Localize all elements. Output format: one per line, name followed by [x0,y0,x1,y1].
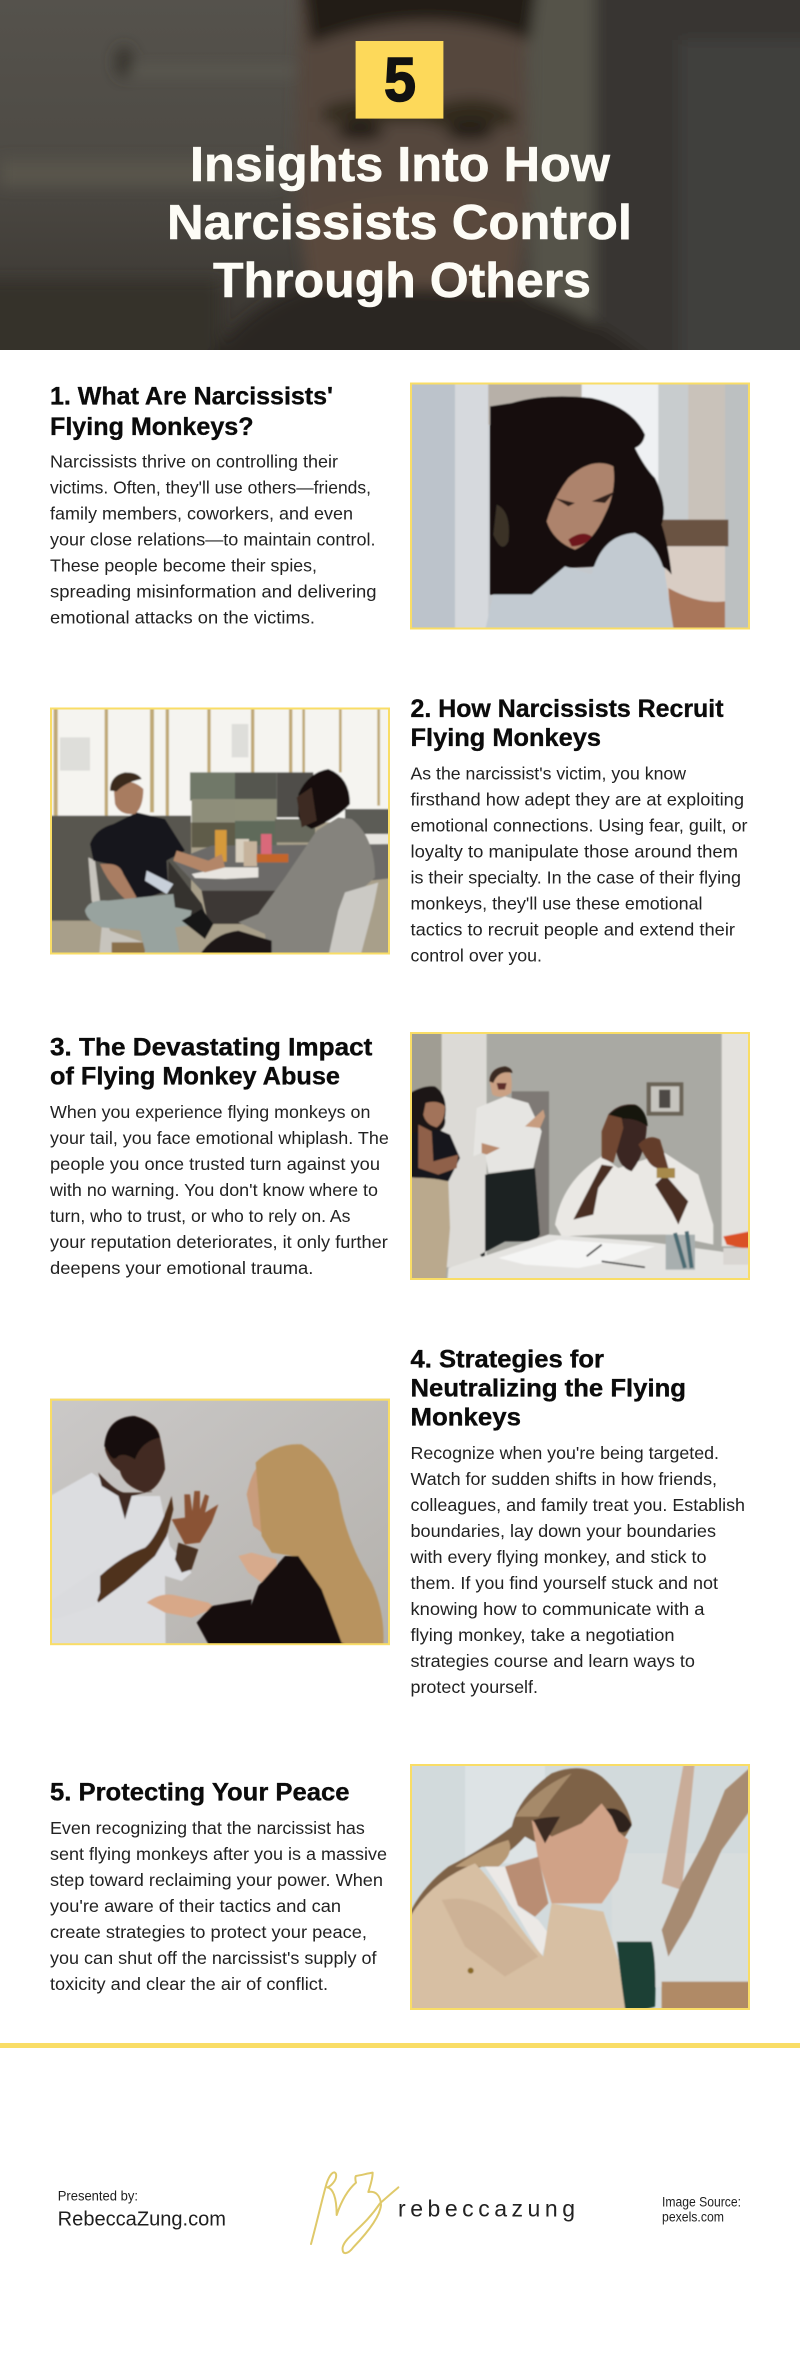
body text: section 2: control over you. [410,946,542,966]
heading: section 4: Monkeys [410,1403,521,1431]
body text: section 4: them. If you find yourself stuck and not [410,1573,718,1593]
body text: section 1: spreading misinformation and delivering [50,582,376,602]
presenter credit [58,2187,226,2231]
body text: section 2: loyalty to manipulate those around them [410,842,738,862]
body text: section 3 [49,1102,389,1278]
panel: section 4 [38,1345,745,1697]
heading: section 5: 5. Protecting Your Peace [50,1778,350,1806]
logo wordmark: rebeccazung [398,2196,575,2222]
photo: angry woman with dark curly hair and beret [410,382,750,630]
body text: section 4: strategies course and learn ways to [410,1651,695,1671]
number badge: 5 [384,46,416,115]
heading: section 3: 3. The Devastating Impact [50,1033,373,1061]
body text: section 3: When you experience flying monkeys on [50,1102,370,1122]
body text: section 2: is their specialty. In the case of their flying [410,868,741,888]
body text: section 3: with no warning. You don't know where to [49,1180,378,1200]
body text: section 2: monkeys, they'll use these emotional [410,894,702,914]
footer [58,2172,741,2253]
header panel [0,0,800,350]
heading: section 3 [50,1033,373,1090]
body text: section 2 [410,764,748,966]
body text: section 4: with every flying monkey, and stick to [409,1547,706,1567]
image source credit: pexels.com [662,2209,724,2224]
photo: man and woman arguing with raised hands [38,1396,395,1656]
number badge [356,41,443,119]
body text: section 5: Even recognizing that the narcissist has [50,1818,365,1838]
body text: section 1 [50,452,376,628]
logo signature mark [311,2172,398,2253]
panel: section 1 [50,371,758,638]
body text: section 4: Recognize when you're being targeted. [410,1443,719,1463]
body text: section 4: flying monkey, take a negotiation [410,1625,674,1645]
body text: section 1: family members, coworkers, and even [50,504,353,524]
heading: section 1: Flying Monkeys? [50,413,254,441]
heading: section 3: of Flying Monkey Abuse [50,1062,340,1090]
header photo: blurred man covering mouth [0,0,800,350]
body text: section 1: These people become their spies, [50,556,317,576]
body text: section 3: deepens your emotional trauma. [50,1258,313,1278]
heading: section 4: Neutralizing the Flying [410,1374,686,1402]
heading: section 1: 1. What Are Narcissists' [50,383,333,411]
panel: section 5 [50,1753,758,2020]
title [167,138,632,308]
logo: rebeccazung signature and wordmark [311,2172,575,2253]
heading: section 2 [410,695,724,752]
heading: section 4: 4. Strategies for [410,1345,604,1373]
body text: section 5: you can shut off the narcissist's supply of [50,1948,377,1968]
body text: section 3: your tail, you face emotional whiplash. The [50,1128,389,1148]
body text: section 5: you're aware of their tactics and can [50,1896,341,1916]
body text: section 1: Narcissists thrive on controlling their [50,452,338,472]
body text: section 3: people you once trusted turn against you [50,1154,380,1174]
photo: man stressed at desk while coworkers laugh [410,1032,750,1280]
body text: section 2: As the narcissist's victim, you know [410,764,686,784]
body text: section 5: toxicity and clear the air of conflict. [50,1974,328,1994]
body text: section 2: firsthand how adept they are at exploiting [410,790,744,810]
body text: section 4: knowing how to communicate with a [410,1599,705,1619]
image source credit: Image Source: [662,2194,741,2209]
body text: section 3: your reputation deteriorates, it only further [50,1232,388,1252]
heading: section 2: Flying Monkeys [410,724,601,752]
photo: two men talking at a table [50,708,390,954]
body text: section 4 [409,1443,745,1697]
photo: woman in cream sweater covering her face [410,1764,750,2010]
presenter credit: RebeccaZung.com [58,2209,226,2231]
body text: section 4: boundaries, lay down your boundaries [410,1521,716,1541]
title: Narcissists Control [167,196,632,250]
body text: section 5: sent flying monkeys after you is a massive [50,1844,387,1864]
body text: section 2: emotional connections. Using fear, guilt, or [410,816,748,836]
presenter credit: Presented by: [58,2187,138,2203]
body text: section 3: turn, who to trust, or who to rely on. As [50,1206,351,1226]
body text: section 1: emotional attacks on the victims. [50,608,315,628]
heading: section 1 [50,383,333,441]
body text: section 4: colleagues, and family treat you. Establish [410,1495,745,1515]
image source credit [662,2194,741,2224]
title: Insights Into How [190,138,611,192]
body text: section 5: create strategies to protect your peace, [50,1922,367,1942]
panel: section 2 [38,695,748,966]
body text: section 1: your close relations—to maintain control. [50,530,375,550]
heading: section 2: 2. How Narcissists Recruit [410,695,724,723]
body text: section 1: victims. Often, they'll use others—friends, [50,478,371,498]
body text: section 2: tactics to recruit people and extend their [410,920,735,940]
body text: section 4: Watch for sudden shifts in how friends, [410,1469,717,1489]
heading: section 4 [410,1345,686,1431]
title: Through Others [213,254,591,308]
body text: section 4: protect yourself. [410,1677,538,1697]
panel: section 3 [49,1021,758,1288]
body text: section 5 [50,1818,387,1994]
body text: section 5: step toward reclaiming your power. When [50,1870,383,1890]
yellow divider [0,2043,800,2048]
